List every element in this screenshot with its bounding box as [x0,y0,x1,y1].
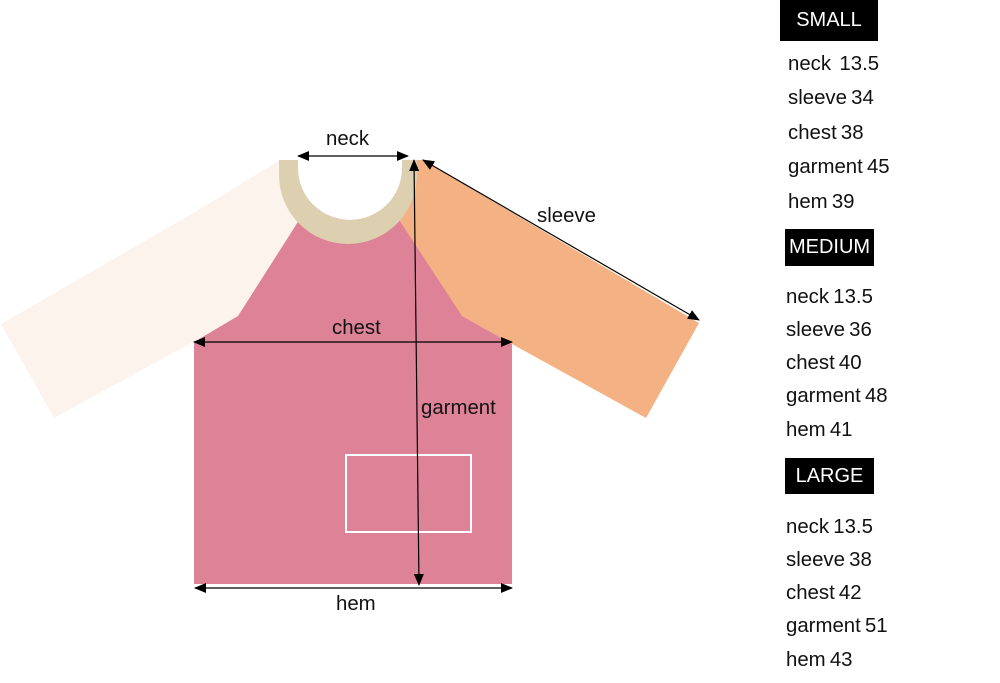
sleeve label: sleeve [537,205,596,227]
large: garment: garment 51 [786,615,888,637]
small: sleeve: sleeve 34 [788,87,874,109]
heading: small [780,0,878,41]
large: sleeve: sleeve 38 [786,549,872,571]
large: neck: neck 13.5 [786,516,873,538]
small: neck: neck 13.5 [788,53,879,75]
medium: sleeve: sleeve 36 [786,319,872,341]
neck label: neck [326,128,370,150]
chest arrow [194,341,512,343]
body [194,203,512,584]
hem arrow [195,587,512,589]
heading: medium: MEDIUM [789,236,870,258]
chest label: chest [332,317,381,339]
neck collar [279,160,417,244]
neck arrow [298,155,408,157]
heading: medium [785,229,874,266]
medium: neck: neck 13.5 [786,286,873,308]
small: hem: hem 39 [788,191,855,213]
heading: large: LARGE [796,465,863,487]
medium: chest: chest 40 [786,352,862,374]
heading: large [785,458,874,494]
large: chest: chest 42 [786,582,862,604]
heading: small: SMALL [796,9,862,31]
medium: garment: garment 48 [786,385,888,407]
right sleeve [390,160,699,418]
small: garment: garment 45 [788,156,890,178]
large: hem: hem 43 [786,649,853,671]
hem label: hem [336,593,376,615]
garment arrow [414,160,419,585]
garment label: garment [421,397,496,419]
medium: hem: hem 41 [786,419,853,441]
small: chest: chest 38 [788,122,864,144]
sleeve arrow [423,160,699,320]
left sleeve [1,160,310,418]
neck opening [298,160,402,220]
pocket [346,455,471,532]
